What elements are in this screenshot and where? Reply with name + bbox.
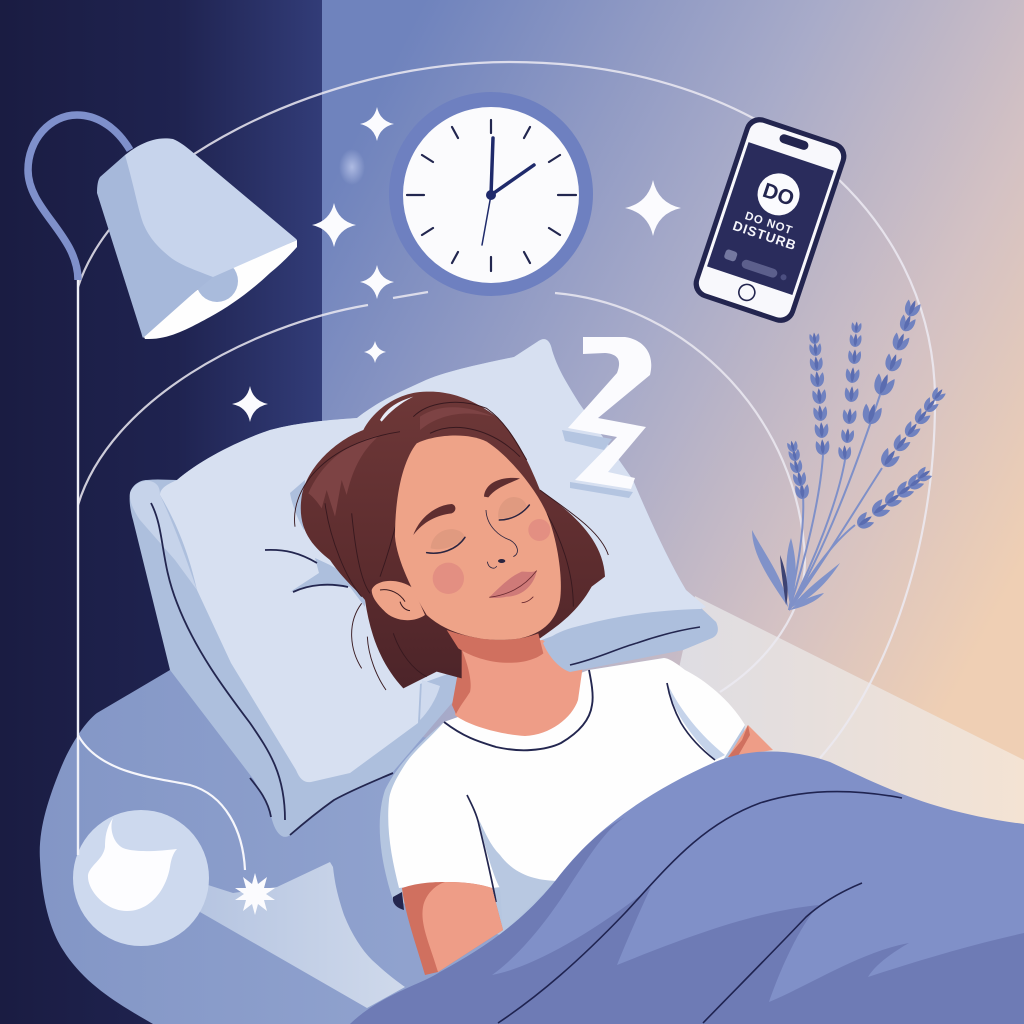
ear <box>372 581 425 620</box>
bed base <box>40 670 500 1024</box>
lips <box>489 571 537 598</box>
icon: sparkle stars <box>232 107 681 422</box>
phone icon text: DO <box>760 179 797 211</box>
shirt <box>380 658 745 935</box>
arms <box>402 725 773 975</box>
sleep Z letters <box>562 337 651 498</box>
icon: phone do not disturb <box>690 113 850 327</box>
nose <box>486 510 517 568</box>
pillow seams <box>151 503 393 835</box>
icon: wall clock <box>389 92 593 296</box>
background: dusk to dawn gradient <box>322 0 1024 1024</box>
bed lit surface <box>200 862 405 1008</box>
lavender leaves <box>752 530 840 610</box>
lavender stems <box>789 395 882 610</box>
lamp shade lit side <box>125 138 297 277</box>
pillow dents <box>290 558 365 607</box>
lamp bulb <box>196 260 238 302</box>
closed eyes <box>427 505 529 553</box>
pillow face <box>160 339 706 782</box>
shirt side shadow <box>479 820 556 932</box>
lavender flower heads <box>786 298 947 532</box>
blanket <box>350 752 1024 1024</box>
pillow outer edge <box>130 339 717 837</box>
lamp opening light <box>143 240 297 339</box>
neck shadow <box>447 630 543 663</box>
routine arcs <box>78 62 935 758</box>
head <box>295 392 608 690</box>
phone message line 1: DO NOT <box>743 210 794 237</box>
pillow <box>130 339 717 837</box>
icon: night lamp globe <box>73 810 209 946</box>
hair highlights <box>308 407 493 517</box>
eyebrows <box>413 478 520 535</box>
icon: lavender sprig <box>752 298 947 610</box>
face <box>395 435 561 640</box>
pillow flap over neck <box>543 609 718 672</box>
floor surface <box>600 596 1024 1024</box>
eyelids <box>431 497 527 549</box>
hair back <box>301 392 605 688</box>
glow spot <box>339 149 365 185</box>
lamp shade shadow side <box>97 155 213 338</box>
background: dark night side <box>0 0 322 1024</box>
hair strands <box>295 402 608 690</box>
neck and chest <box>444 640 593 750</box>
lamp arm <box>28 115 130 280</box>
wire and spark <box>78 735 275 915</box>
blush <box>433 519 550 594</box>
blanket fold lines <box>498 791 902 1023</box>
phone message line 2: DISTURB <box>731 218 799 253</box>
floor lamp <box>28 115 297 855</box>
sleeping person <box>295 392 773 975</box>
blanket fold shadow <box>350 817 1024 1024</box>
lamp pole <box>77 280 79 855</box>
